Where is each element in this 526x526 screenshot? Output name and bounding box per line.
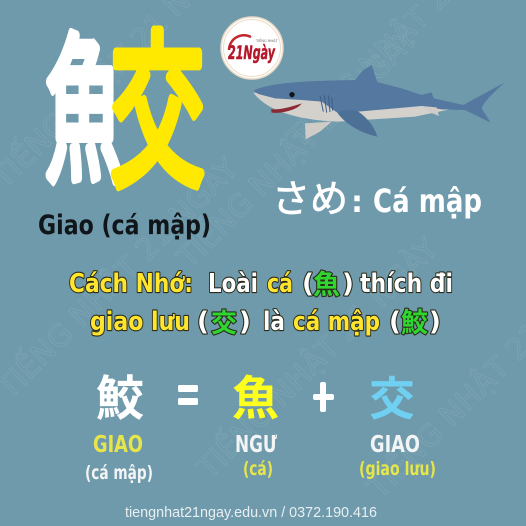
rear fin bbox=[422, 106, 439, 116]
main kanji bbox=[45, 0, 205, 221]
component labels: fish bbox=[235, 432, 278, 480]
footer contact: tiengnhat21ngay.edu.vn / 0372.190.416 bbox=[125, 504, 377, 521]
logo badge bbox=[221, 17, 283, 79]
watermark pattern: TIẾNG NHẬT 21 NGÀY bbox=[187, 228, 446, 486]
gills bbox=[320, 95, 333, 113]
mouth bbox=[271, 103, 302, 113]
component labels: fish: NGƯ bbox=[235, 432, 278, 458]
component labels: shark bbox=[85, 432, 153, 484]
component labels: exchange: GIAO bbox=[370, 432, 420, 458]
mnemonic line 2: giao lưu bbox=[90, 307, 190, 337]
shark back bbox=[253, 65, 504, 123]
japanese word: さめ bbox=[272, 168, 348, 223]
equation: exchange: 交 bbox=[369, 363, 415, 429]
component labels: shark: GIAO bbox=[93, 432, 143, 458]
kanji reading label: Giao (cá mập) bbox=[38, 210, 211, 241]
component labels: exchange bbox=[359, 432, 436, 480]
mnemonic line 2: ) bbox=[239, 307, 251, 337]
pectoral fin bbox=[338, 110, 377, 137]
equation: kanji: 鮫 bbox=[96, 359, 144, 429]
mnemonic line 1: Cách Nhớ: bbox=[69, 269, 193, 299]
eye bbox=[289, 92, 295, 97]
mnemonic line 2: cá mập bbox=[293, 307, 380, 337]
mnemonic line 2: ( bbox=[197, 307, 209, 337]
mnemonic line 1 bbox=[69, 263, 453, 302]
colon and meaning: : bbox=[351, 185, 363, 220]
mnemonic line 2: ( bbox=[389, 307, 401, 337]
mnemonic line 1: Loài bbox=[208, 269, 258, 299]
mnemonic line 2 bbox=[90, 301, 441, 340]
mnemonic line 2: ) bbox=[429, 307, 441, 337]
mnemonic line 1: 魚 bbox=[313, 263, 340, 302]
component labels: fish: (cá) bbox=[243, 458, 273, 480]
logo badge: TIẾNG NHẬT bbox=[255, 37, 278, 43]
colon and meaning: Cá mập bbox=[373, 182, 482, 220]
equation: fish radical: 魚 bbox=[232, 360, 279, 429]
colon and meaning bbox=[351, 182, 482, 220]
shark belly bbox=[253, 93, 455, 122]
equals sign bbox=[178, 385, 198, 405]
shark illustration bbox=[253, 65, 504, 139]
watermark pattern: TIẾNG NHẬT 21 NGÀY bbox=[167, 18, 426, 276]
mnemonic line 1: thích đi bbox=[360, 269, 453, 299]
mnemonic line 1: ( bbox=[302, 269, 314, 299]
component labels: shark: (cá mập) bbox=[85, 462, 153, 484]
mnemonic line 2: 交 bbox=[211, 303, 237, 340]
mnemonic line 2: 鮫 bbox=[401, 301, 428, 340]
lower pectoral fin bbox=[305, 122, 332, 139]
component labels: exchange: (giao lưu) bbox=[359, 458, 436, 480]
mnemonic line 1: ) bbox=[342, 269, 354, 299]
mnemonic line 2: là bbox=[263, 307, 285, 337]
logo badge: 21Ngày bbox=[228, 42, 276, 64]
mnemonic line 1: cá bbox=[267, 269, 293, 299]
plus sign bbox=[313, 382, 334, 412]
